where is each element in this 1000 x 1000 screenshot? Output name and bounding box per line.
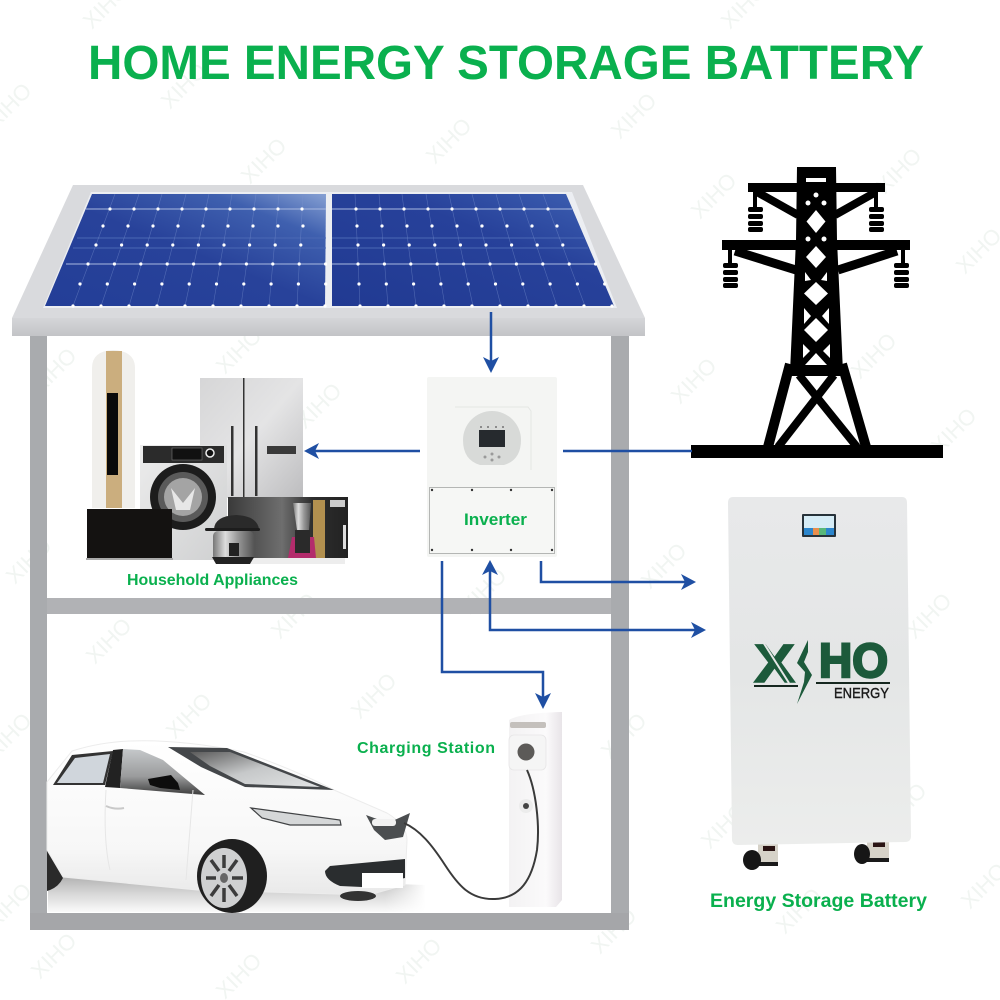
brand logo xyxy=(754,634,890,704)
watermarks: XIHO xyxy=(846,328,902,384)
watermarks: XIHO xyxy=(636,538,692,594)
watermarks: XIHO xyxy=(796,698,852,754)
label: household appliances: Household Appliances xyxy=(127,572,298,589)
watermarks: XIHO xyxy=(596,708,652,764)
solar panel: right xyxy=(332,194,614,306)
arrow: solar panels to inverter xyxy=(483,312,499,373)
label: charging station: Charging Station xyxy=(357,740,495,757)
watermarks: XIHO xyxy=(686,168,742,224)
energy storage battery xyxy=(728,497,911,870)
watermarks: XIHO xyxy=(161,688,217,744)
charge plug xyxy=(366,813,410,840)
television xyxy=(86,509,173,560)
arrow: inverter to battery xyxy=(541,561,696,590)
charging station xyxy=(509,712,562,907)
watermarks: XIHO xyxy=(236,133,292,189)
watermarks: XIHO xyxy=(926,403,982,459)
watermarks: XIHO xyxy=(456,563,512,619)
arrow: inverter to charging station xyxy=(442,561,551,709)
brand logo: ENERGY xyxy=(834,685,889,702)
solar panels xyxy=(43,192,617,308)
washing machine xyxy=(140,445,227,560)
arrow: battery to inverter (two-way) xyxy=(482,560,706,638)
watermarks: XIHO xyxy=(266,588,322,644)
rice cooker xyxy=(205,515,260,564)
car shadow xyxy=(48,872,426,913)
pylon xyxy=(691,167,943,458)
watermarks: XIHO xyxy=(771,883,827,939)
watermarks: XIHO xyxy=(391,933,447,989)
watermarks: XIHO xyxy=(81,613,137,669)
tyre under bumper xyxy=(340,891,376,901)
label: inverter: Inverter xyxy=(464,510,527,529)
watermarks: XIHO xyxy=(211,323,267,379)
brand logo: X xyxy=(754,634,795,694)
watermarks: XIHO xyxy=(421,113,477,169)
watermarks: XIHO xyxy=(666,353,722,409)
front wheel xyxy=(197,839,267,913)
watermarks: XIHO xyxy=(606,88,662,144)
watermarks: XIHO xyxy=(291,378,347,434)
line: inverter to grid xyxy=(563,450,692,452)
air conditioner xyxy=(92,350,135,508)
refrigerator xyxy=(200,378,303,498)
house frame xyxy=(30,335,629,930)
watermarks: XIHO xyxy=(1,533,57,589)
charging cable xyxy=(404,770,538,899)
watermarks: XIHO xyxy=(696,798,752,854)
watermarks: XIHO xyxy=(26,343,82,399)
watermarks: XIHO xyxy=(586,903,642,959)
brand logo: HO xyxy=(819,635,888,688)
display screen xyxy=(802,514,836,537)
car xyxy=(47,741,426,913)
watermarks: XIHO xyxy=(156,58,212,114)
watermarks: XIHO xyxy=(26,928,82,984)
solar panel: left xyxy=(45,194,326,306)
rear tyre xyxy=(47,847,63,891)
watermarks: XIHO xyxy=(871,143,927,199)
wheels xyxy=(743,840,889,870)
watermarks: XIHO xyxy=(876,778,932,834)
microwave xyxy=(225,497,348,564)
grille xyxy=(325,859,405,887)
title: HOME ENERGY STORAGE BATTERY xyxy=(88,37,924,90)
arrow: inverter to appliances xyxy=(304,443,420,459)
blender xyxy=(288,503,316,558)
watermarks: XIHO xyxy=(346,668,402,724)
watermarks: XIHO xyxy=(901,588,957,644)
inverter xyxy=(427,377,557,557)
label: energy storage battery: Energy Storage Battery xyxy=(710,890,927,912)
household appliances xyxy=(86,350,348,564)
roof xyxy=(12,185,645,336)
